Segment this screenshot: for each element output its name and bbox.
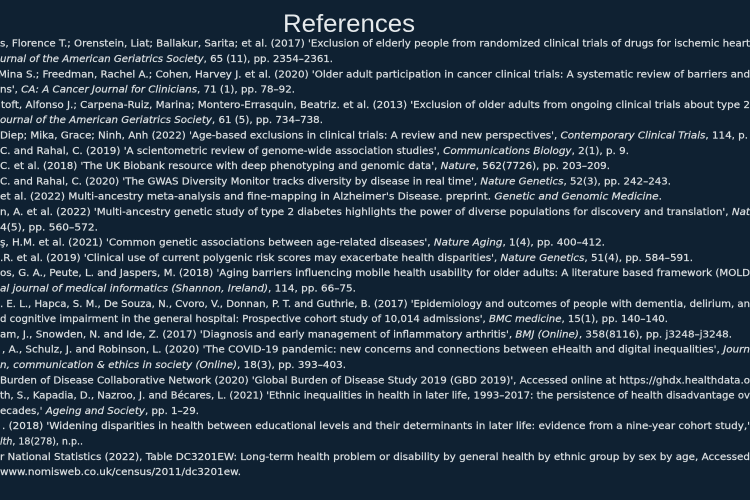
reference 19 [0,452,750,478]
reference 2: Mina S.; Freedman, Rachel A.; Cohen, Harvey J. et al. (2020) 'Older adult participation in cancer clinical trials: A systematic review of barriers and [0,69,750,80]
reference 14: am, J., Snowden, N. and Ide, Z. (2017) 'Diagnosis and early management of inflammatory arthritis', BMJ (Online), 358(8116), pp. j3248–j3248. [0,329,732,340]
reference 9 [0,207,750,233]
reference 3: toft, Alfonso J.; Carpena-Ruiz, Marina; Montero-Errasquin, Beatriz. et al. (2013) 'Exclusion of older adults from ongoing clinical trials about type 2 [1,100,750,111]
reference 2 [0,69,750,96]
reference 4: Diep; Mika, Grace; Ninh, Anh (2022) 'Age-based exclusions in clinical trials: A review and new perspectives', Contemporary Clinical Trials , 114, p. [0,130,748,142]
reference 15 [0,345,750,371]
reference 15: , A., Schulz, J. and Robinson, L. (2020) 'The COVID-19 pandemic: new concerns and connections between eHealth and digital inequalities', Journ [2,345,750,356]
reference 16: Burden of Disease Collaborative Network (2020) 'Global Burden of Disease Study 2019 (GBD 2019)', Accessed online at https://ghdx.healthdata.o [0,375,750,386]
reference 9: n, A. et al. (2022) 'Multi-ancestry genetic study of type 2 diabetes highlights the power of diverse populations for discovery and translation', Nat [0,207,750,218]
reference 8: et al. (2022) Multi-ancestry meta-analysis and fine-mapping in Alzheimer's Disease. preprint. Genetic and Genomic Medicine . [0,192,662,203]
reference 2: ns', CA: A Cancer Journal for Clinicians , 71 (1), pp. 78–92. [0,85,295,96]
reference 18 [0,421,750,448]
reference 3 [0,100,750,126]
reference 1: urnal of the American Geriatrics Society , 65 (11), pp. 2354–2361. [0,54,333,65]
reference 19: r National Statistics (2022), Table DC3201EW: Long-term health problem or disability by general health by ethnic group by sex by age, Accessed [0,452,750,463]
reference 17 [0,390,750,417]
reference 12: os, G. A., Peute, L. and Jaspers, M. (2018) 'Aging barriers influencing mobile health usability for older adults: A literature based framework (MOLD [0,268,750,279]
reference 18: . (2018) 'Widening disparities in health between educational levels and their determinants in later life: evidence from a nine-year cohort study,' [2,421,750,432]
reference 15: n, communication & ethics in society (Online) , 18(3), pp. 393–403. [0,360,346,371]
reference 1 [0,39,750,65]
reference 7: C. and Rahal, C. (2020) 'The GWAS Diversity Monitor tracks diversity by disease in real time', Nature Genetics, 52(3), pp. 242–243. [0,176,671,187]
reference 1: s, Florence T.; Orenstein, Liat; Ballakur, Sarita; et al. (2017) 'Exclusion of elderly people from randomized clinical trials of drugs for ischemic heart [0,39,750,50]
reference 13: d cognitive impairment in the general hospital: Prospective cohort study of 10,014 admissions', BMC medicine, 15(1), pp. 140–140. [0,314,668,325]
reference 18: lth, 18(278), n.p.. [0,436,83,448]
title: References [283,10,415,38]
reference 12: al journal of medical informatics (Shannon, Ireland) , 114, pp. 66–75. [0,284,356,294]
reference 17: ecades,' Ageing and Society, pp. 1–29. [0,406,199,417]
reference 10: ş, H.M. et al. (2021) 'Common genetic associations between age-related diseases', Nature Aging , 1(4), pp. 400–412. [0,238,605,249]
reference 19: www.nomisweb.co.uk/census/2011/dc3201ew. [0,467,241,478]
reference 6: C. et al. (2018) 'The UK Biobank resource with deep phenotyping and genomic data', Nature, 562(7726), pp. 203–209. [0,161,610,172]
reference 5: C. and Rahal, C. (2019) 'A scientometric review of genome-wide association studies', Communications Biology , 2(1), p. 9. [0,146,629,157]
reference 9: 4(5), pp. 560–572. [0,222,98,233]
reference 13 [0,299,750,325]
reference 11: .R. et al. (2019) 'Clinical use of current polygenic risk scores may exacerbate health disparities', Nature Genetics , 51(4), pp. 584–591. [0,253,693,264]
reference 3: ournal of the American Geriatrics Society , 61 (5), pp. 734–738. [0,115,323,126]
reference 12 [0,268,750,294]
reference 17: th, S., Kapadia, D., Nazroo, J. and Bécares, L. (2021) 'Ethnic inequalities in health in later life, 1993–2017: the persistence of health disadvantage ov [0,390,750,402]
reference 13: . E. L., Hapca, S. M., De Souza, N., Cvoro, V., Donnan, P. T. and Guthrie, B. (2017) 'Epidemiology and outcomes of people with dementia, delirium, an [0,299,750,310]
